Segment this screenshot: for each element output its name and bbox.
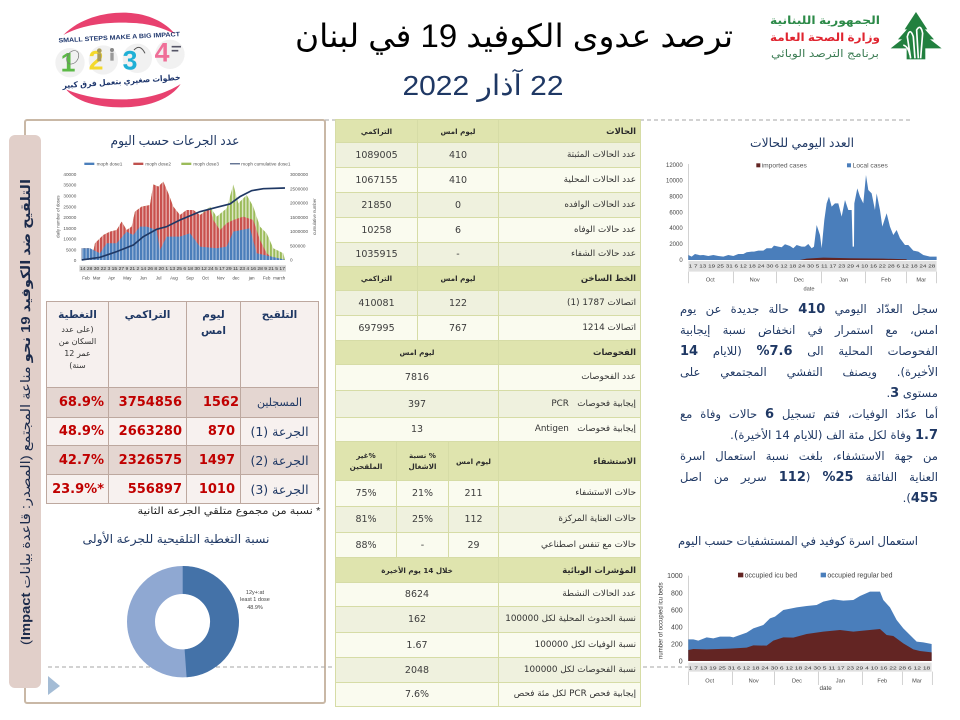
section: cases: 410 [449,150,467,160]
chart: occupied beds: number of occupied icu beds [659,582,665,659]
donut label: 12y+:at [246,590,265,596]
section: cases: 13 [411,424,423,435]
chart: occupied beds: date [819,685,832,692]
x axis band [688,663,932,672]
month labels: Feb [263,275,271,280]
section: tests: ليوم امس [400,348,434,357]
y axis: 200 [671,641,683,648]
section: cases: حالات العناية المركزة [558,514,636,524]
donut label: least 1 dose [240,597,270,603]
table: vaccination counts [46,301,319,504]
month labels: Jan [839,278,848,284]
section: cases: 211 [464,488,483,499]
section: cases: 75% [355,488,377,499]
section: hotline [336,267,640,290]
month labels: Sep [186,275,194,280]
table: vaccination counts: 2326575 [119,452,182,468]
logo: small steps make a big impact: 1 [61,48,76,78]
panel: vaccination frame [25,120,325,703]
section: epidemiological indicators [336,558,640,582]
section: cases: 21% [412,488,433,499]
month labels: Oct [706,278,715,284]
section: cases: التراكمي [361,126,392,136]
section: cases: نسبة الفحوصات لكل 100000 [524,664,636,674]
axes labels [63,172,77,263]
section: cases: حالات مع تنفس اصطناعي [541,540,636,550]
logo: small steps make a big impact: SMALL STEPS MAKE A BIG IMPACT [58,31,180,45]
chart: daily vaccine doses [55,161,317,280]
text block: daily summary: مستوى 3. [886,386,938,401]
section: cases: 767 [449,322,467,334]
y axis: 600 [671,607,683,614]
axes labels: 25000 [63,204,77,209]
month labels [706,278,926,293]
section: hospitalisation: الاستشفاء [593,456,636,466]
section: cases: عدد الحالات المثبتة [567,150,636,160]
legend: Local cases [853,163,888,170]
y axis: 400 [671,624,683,631]
ministry name: وزارة الصحة العامة [770,32,880,44]
section: cases: حالات الاستشفاء [575,488,636,498]
axes labels: 30000 [63,194,77,199]
logo: small steps make a big impact [55,13,185,107]
y axis: 2000 [669,242,683,248]
y axis: 800 [671,590,683,597]
logo: small steps make a big impact: 2 [89,45,103,75]
section: cases: ليوم امس [441,126,476,136]
chart: daily vaccine doses: 1000000 [290,229,309,234]
ministry name [770,15,880,60]
text block: daily summary: امس، مع استمرار في انخفاض نسبة إيجابية [680,323,938,337]
chart: daily vaccine doses: 500000 [290,243,306,248]
logo: small steps make a big impact: 4 [155,37,170,67]
section: cases: 2048 [405,664,429,676]
table: vaccination counts: 42.7% [59,452,104,468]
month labels: May [123,275,132,280]
imported cases area [800,258,907,260]
chart: daily cases: 1 7 13 19 25 31 6 12 18 24 30 6 12 18 24 30 5 11 17 23 29 4 10 16 22 28 6 12 18 24 28 [689,264,936,269]
section: cases: 1.67 [406,640,428,650]
month labels: Nov [749,678,759,684]
section: hotline: ليوم امس [441,274,476,283]
text block: daily summary: العناية الفائقة 25% (112 سرير من اصل [680,470,938,485]
section: hospitalisation: الاشغال [409,462,436,471]
legend: occupied icu bed [745,572,797,579]
panel tab: vaccination title: التلقيح ضد الكوفيد 19 نحو مناعة المجتمع (المصدر: قاعدة بيانات Impact ) [18,179,34,645]
y axis: 0 [679,658,683,665]
footnote: * نسبة من مجموع متلقي الجرعة الثانية [138,506,321,517]
axes labels: 5000 [66,247,77,252]
section: cases: الحالات [606,126,636,136]
section: cases: نسبة الوفيات لكل 100000 [535,640,636,650]
legend [756,163,888,170]
axes labels: 15000 [63,226,77,231]
legend: moph cumulative dose1 [241,161,291,166]
heading: daily cases: العدد اليومي للحالات [750,136,854,151]
logo: small steps make a big impact: خطوات صغيري بتعمل فرق كبير [61,73,181,90]
month labels: Dec [794,278,804,284]
ministry name: برنامج الترصد الوبائي [771,48,879,60]
chart: daily vaccine doses: daily number of doses [55,195,60,238]
month labels: Jul [156,275,161,280]
month labels [705,678,922,684]
text block: daily summary [680,302,938,506]
chart: first dose coverage donut [141,566,270,677]
axes labels: 0 [74,258,77,263]
section: cases: 29 [467,540,480,550]
section: hospitalisation: الملقحين [350,462,382,471]
y axis [667,573,683,665]
section: cases: 8624 [405,589,429,600]
section: cases: 81% [355,514,377,525]
section: cases: اتصالات 1787 (1) [567,298,636,308]
month labels: Oct [705,678,714,684]
table: vaccination counts: ليوم امس [201,309,226,337]
section: cases: 697995 [358,322,395,334]
month labels: Apr [108,275,116,280]
chart: occupied beds [659,572,932,692]
panel tab: vaccination title [9,135,41,688]
section: tests [336,341,640,364]
table: vaccination counts: 48.9% [59,424,104,439]
section: cases: 1089005 [355,150,398,160]
section: tests: الفحوصات [593,347,636,357]
dose 2 bars [82,182,285,260]
legend: moph dose1 [97,161,123,166]
y axis: 4000 [669,226,683,232]
table: vaccination counts: التغطية [58,309,97,321]
section: cases: إيجابية فحص PCR لكل مئة فحص [514,689,636,699]
axes labels: 35000 [63,183,77,188]
legend: moph dose2 [145,161,171,166]
table: vaccination counts: الجرعة (2) [250,452,309,468]
section: hotline: الخط الساخن [581,273,636,283]
section: cases: عدد الفحوصات [581,372,636,382]
month labels: Aug [170,275,178,280]
section: cases: عدد حالات الشفاء [571,249,636,259]
text block: daily summary: من جهة الاستشفاء، بلغت نسبة استعمال اسرة [680,449,938,463]
table: vaccination counts: (على عدد السكان من عمر 12 سنة) [59,325,96,370]
ministry name: الجمهورية اللبنانية [770,15,880,27]
chart: daily vaccine doses: 1500000 [290,215,309,220]
section: cases: - [421,540,424,550]
section: cases: إيجابية فحوصات Antigen [535,424,636,434]
table: vaccination counts: التراكمي [125,309,170,321]
text block: daily summary: الفحوصات المحلية الى 7.6% (للايام 14 [680,344,938,359]
date heading: 22 آذار 2022 [402,69,564,102]
section: cases: 88% [355,540,377,550]
section: hotline: التراكمي [361,274,392,283]
section: cases: عدد الحالات المحلية [564,174,636,184]
heading: coverage donut: نسبة التغطية التلقيحية للجرعة الأولى [82,531,270,547]
logo: small steps make a big impact: 3 [123,45,137,75]
y axis: 8000 [669,194,683,200]
table: vaccination counts: التلقيح [262,309,297,321]
section: cases: 25% [412,514,433,525]
month labels: Oct [202,275,209,280]
y axis: 1000 [667,573,683,580]
legend [84,161,291,166]
section: cases: عدد الحالات الوافده [564,200,636,210]
x axis band [79,265,286,272]
donut label: 48.9% [247,605,263,611]
donut label [240,590,270,611]
section: cases: إيجابية فحوصات PCR [551,398,636,408]
logo: ministry of public health [770,12,942,60]
section: cases: 7816 [405,372,429,383]
table: vaccination counts: الجرعة (1) [250,424,309,439]
month labels: Mar [93,275,101,280]
heading: hospital beds: استعمال اسرة كوفيد في المستشفيات حسب اليوم [678,534,918,549]
table: vaccination counts: 556897 [128,482,182,496]
section: cases: 410 [449,174,467,186]
dose 1 bars [82,227,285,260]
chart: daily vaccine doses: 2000000 [290,201,309,206]
axes labels: 20000 [63,215,77,220]
section: cases: عدد حالات الوفاه [574,224,636,234]
table: vaccination counts: 1497 [199,452,235,468]
month labels: Mar [912,678,922,684]
section: cases: 0 [455,200,461,210]
section: cases: 122 [449,298,467,308]
section: cases: 1035915 [355,249,398,260]
section: cases: 21850 [361,200,392,210]
regular beds area [688,592,932,661]
text block: daily summary: الأخيرة). ويصنف التفشي المجتمعي على [680,365,938,379]
month labels: Mar [916,278,926,284]
section: hospitalisation: %غير [356,451,376,460]
table: vaccination counts: 3754856 [119,395,182,410]
axes labels: 40000 [63,172,77,177]
section: cases: 1067155 [355,174,398,186]
table: vaccination counts: المسجلين [257,396,302,409]
ICU beds area [688,629,932,661]
section: cases: 6 [455,224,461,236]
section: hospitalisation: ليوم امس [456,456,491,466]
section: cases: - [456,249,460,260]
heading: daily doses: عدد الجرعات حسب اليوم [110,133,240,149]
y axis: 6000 [669,210,683,216]
section: cases: 10258 [361,224,392,236]
month labels: march [273,275,286,280]
dose 3 bars [82,182,285,260]
legend [738,572,893,579]
table: vaccination counts: 2663280 [119,424,182,439]
month labels: Dec [792,678,802,684]
icon: cedar [891,12,942,59]
table: vaccination counts: الجرعة (3) [250,482,309,496]
cumulative line [82,188,285,260]
month labels: Feb [82,275,90,280]
legend: occupied regular bed [827,572,893,579]
text block: daily summary: 455). [903,491,938,506]
table: vaccination counts: 68.9% [59,395,104,410]
legend: moph dose3 [193,161,219,166]
table: vaccination counts: 1010 [199,482,235,496]
month labels: Feb [881,278,891,284]
section: cases: 397 [408,398,426,410]
section: cases: 7.6% [405,689,429,700]
chart: daily cases [666,163,937,293]
section: cases: عدد الحالات النشطة [562,589,636,599]
y axis: 0 [679,258,683,264]
chart: daily vaccine doses: cumulative number [312,198,317,235]
section: cases: 410081 [358,298,395,308]
legend: imported cases [762,163,807,170]
x axis band [688,261,937,272]
section: cases [336,120,640,706]
table: vaccination counts: 1562 [203,395,239,410]
main title: ترصد عدوى الكوفيد 19 في لبنان [295,18,733,55]
section: epidemiological indicators: المؤشرات الوبائية [562,564,636,574]
month labels: dec [232,275,240,280]
table: vaccination counts: 870 [208,424,235,439]
chart: daily vaccine doses: 14 28 30 22 3 15 27 9 21 2 14 26 8 20 1 13 25 6 18 30 12 24 5 17 29 11 23 4 16 28 9 21 5 17 [80,266,285,272]
month labels: Nov [750,278,760,284]
section: hospitalisation: % نسبة [409,451,436,460]
month labels: Nov [217,275,225,280]
month labels: date [803,287,814,293]
chart: daily vaccine doses: 0 [290,258,293,263]
table: surveillance indicators [335,119,641,707]
y axis: 12000 [666,163,683,169]
local cases area [688,175,937,260]
month labels: Feb [877,678,887,684]
chart: daily vaccine doses: 3000000 [290,172,309,177]
section: hospitalisation [336,442,640,480]
section: cases: اتصالات 1214 [582,322,636,332]
section: cases: 112 [464,514,483,525]
text block: daily summary: 1.7 وفاة لكل مئة الف (للايام 14 الأخيرة). [730,428,938,443]
table: vaccination counts: 23.9%* [52,482,104,496]
arrow [48,676,60,695]
text block: daily summary: أما عدّاد الوفيات، فتم تسجيل 6 حالات وفاة مع [680,407,938,422]
month labels: Jun [140,275,147,280]
text block: daily summary: سجل العدّاد اليومي 410 حالة جديدة عن يوم [680,302,938,317]
y axis: 10000 [666,178,683,184]
chart: occupied beds: 1 7 13 19 25 31 6 12 18 24 30 6 12 18 24 30 5 11 17 23 29 4 10 16 22 28 6 12 18 [689,665,931,670]
month labels: Jan [836,678,845,684]
section: cases: 162 [408,614,426,625]
chart: daily vaccine doses: 2500000 [290,186,309,191]
section: epidemiological indicators: خلال 14 يوم الأخيرة [381,566,453,574]
y axis [666,163,683,264]
axes labels: 10000 [63,237,77,242]
month labels: jan [248,275,255,280]
section: cases: نسبة الحدوث المحلية لكل 100000 [505,614,636,624]
month labels [82,275,286,280]
